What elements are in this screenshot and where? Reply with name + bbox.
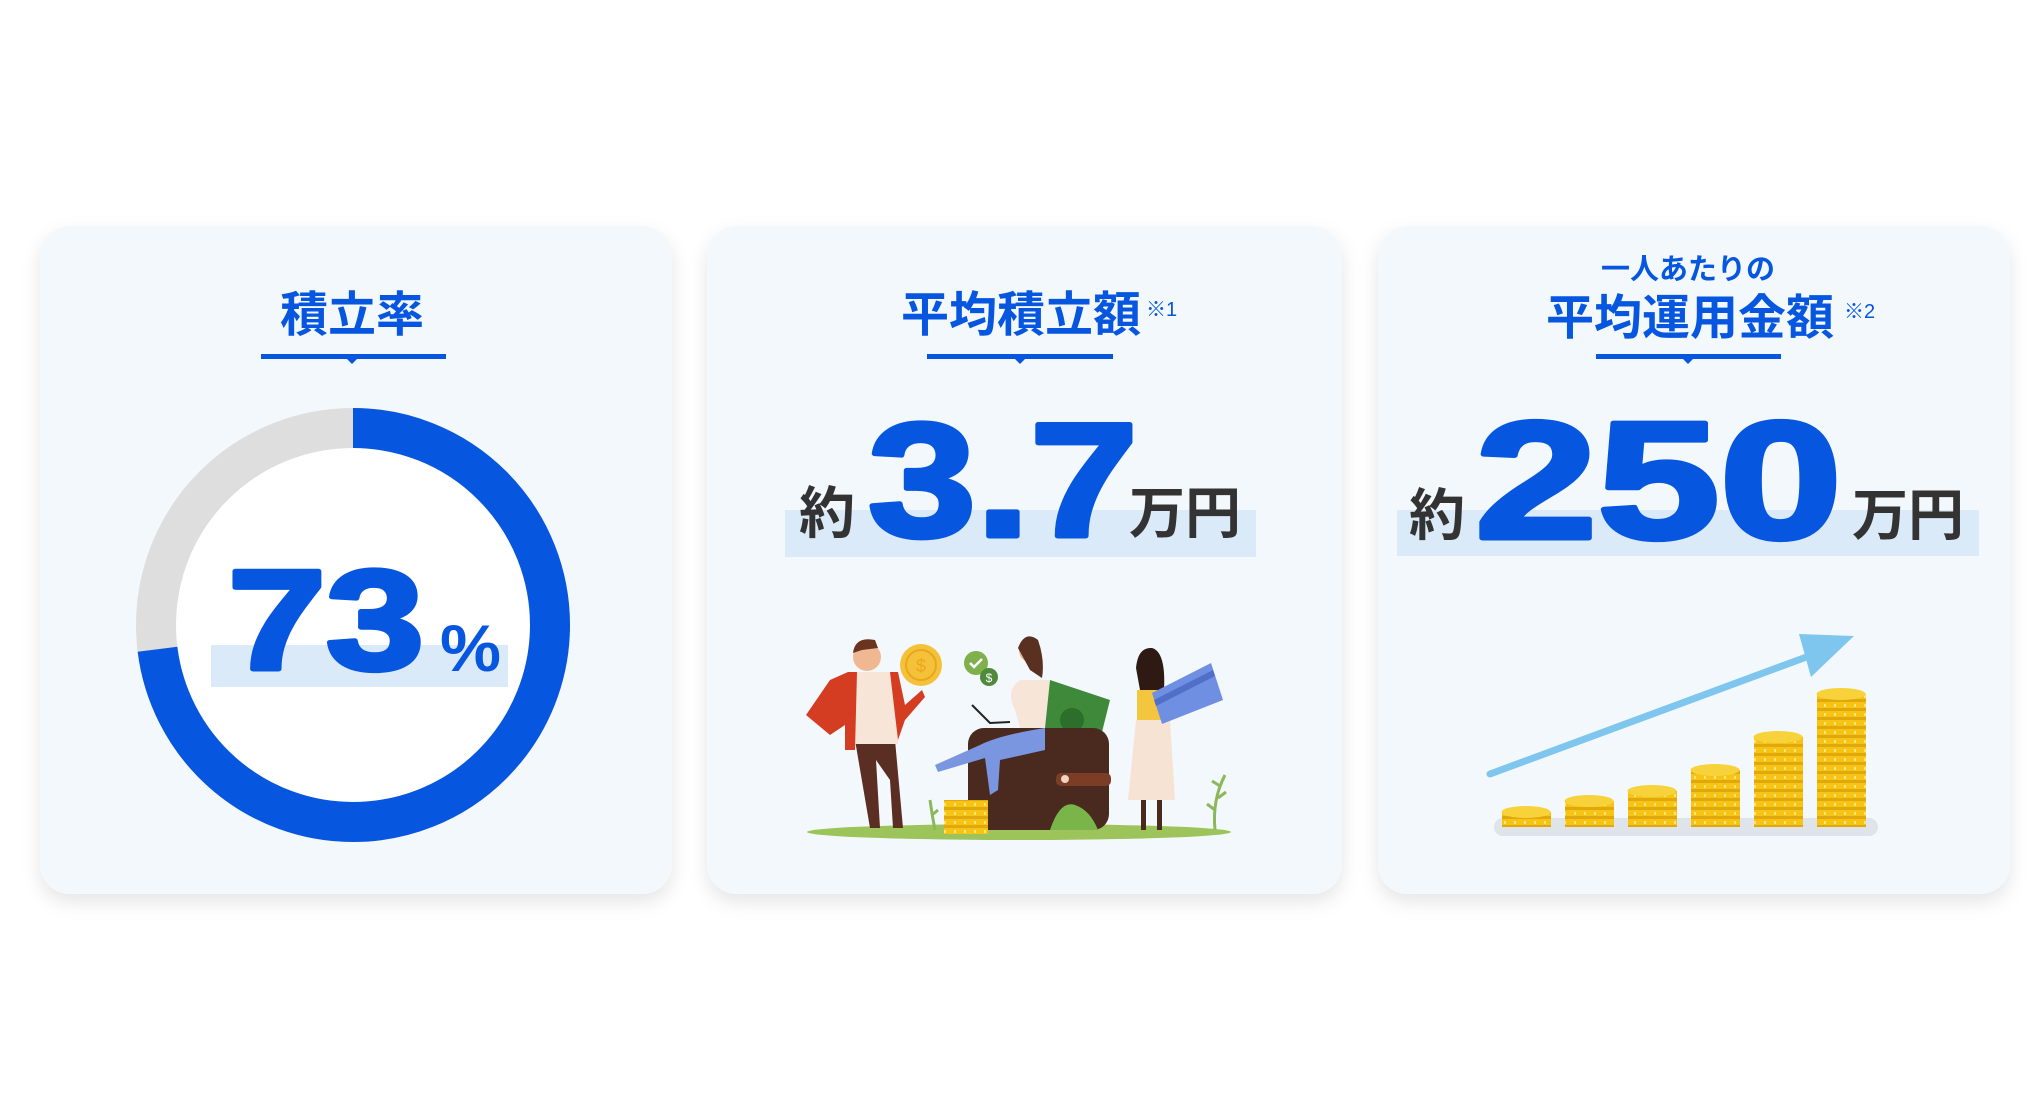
illustration: people with wallet and money: $ bbox=[916, 656, 926, 676]
panel: savings rate bbox=[40, 226, 672, 894]
donut chart 73% bbox=[156, 428, 550, 822]
heading: 積立率: 積立率 bbox=[280, 289, 424, 342]
donut chart 73%: % bbox=[440, 611, 501, 685]
value: 約250万円: 約 bbox=[1409, 484, 1465, 547]
value: 約3.7万円 bbox=[785, 390, 1256, 571]
panel: average contribution bbox=[707, 226, 1342, 894]
heading: 積立率 bbox=[261, 289, 446, 364]
value: 約250万円: 万円 bbox=[1852, 484, 1964, 547]
value: 約250万円: 250 bbox=[1475, 388, 1842, 574]
value: 約3.7万円: 約 bbox=[799, 482, 855, 545]
heading: 一人あたりの 平均運用金額: 平均運用金額 bbox=[1546, 292, 1834, 345]
illustration: people with wallet and money: $ bbox=[986, 671, 993, 685]
value: 約3.7万円: 万円 bbox=[1129, 482, 1241, 545]
heading: 平均積立額: 平均積立額 bbox=[901, 289, 1141, 342]
heading: 平均積立額 bbox=[901, 289, 1177, 364]
growth chart: coin stacks with arrow bbox=[1490, 634, 1878, 836]
value: 約3.7万円: 3.7 bbox=[868, 390, 1138, 571]
illustration: people with wallet and money bbox=[806, 636, 1231, 840]
heading: 一人あたりの 平均運用金額 bbox=[1546, 254, 1875, 364]
panel: average assets per person bbox=[1378, 226, 2010, 894]
heading: 一人あたりの 平均運用金額: 一人あたりの bbox=[1601, 254, 1775, 286]
value: 約250万円 bbox=[1397, 388, 1979, 574]
heading: 平均積立額: ※1 bbox=[1146, 299, 1177, 321]
heading: 一人あたりの 平均運用金額: ※2 bbox=[1844, 301, 1875, 323]
donut chart 73%: 73 bbox=[228, 541, 424, 700]
